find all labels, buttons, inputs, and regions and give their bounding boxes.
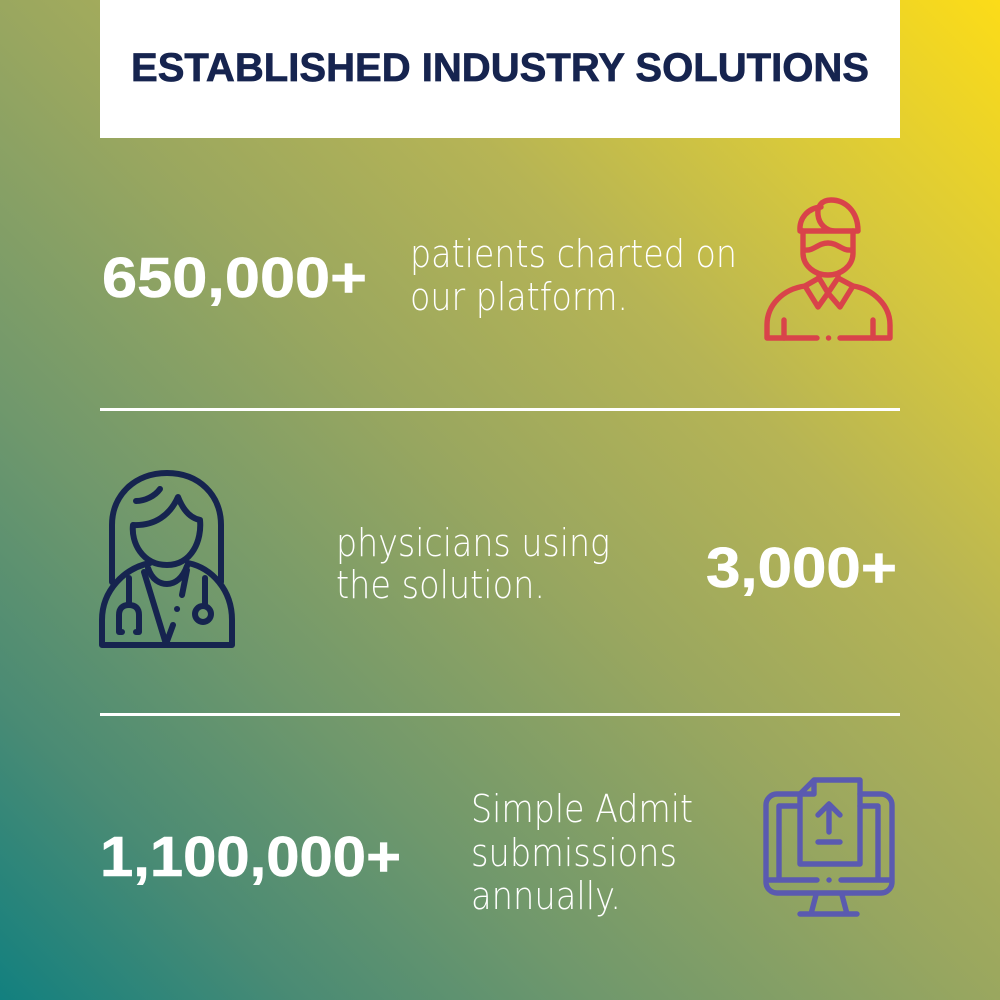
text: patients description: our platform. [410,275,628,319]
text: physicians description: the solution. [336,563,545,607]
stat: submissions number: 1,100,000+ [100,825,401,889]
stat: physicians number: 3,000+ [706,536,897,600]
text: submissions description: annually. [471,874,621,918]
divider 1 [100,408,900,411]
stat: patients number: 650,000+ [102,246,367,310]
icon: patient [767,200,890,338]
icon: physician [102,473,232,645]
header panel [100,0,900,138]
text: physicians description: physicians using [336,521,610,565]
text: physicians description [336,521,610,607]
title: ESTABLISHED INDUSTRY SOLUTIONS [131,46,869,90]
text: patients description: patients charted on [410,232,737,276]
text: submissions description: submissions [471,831,677,875]
text: submissions description [471,787,693,918]
text: submissions description: Simple Admit [471,787,693,831]
divider 2 [100,713,900,716]
text: patients description [410,232,737,319]
icon: monitor with document upload [766,780,892,914]
